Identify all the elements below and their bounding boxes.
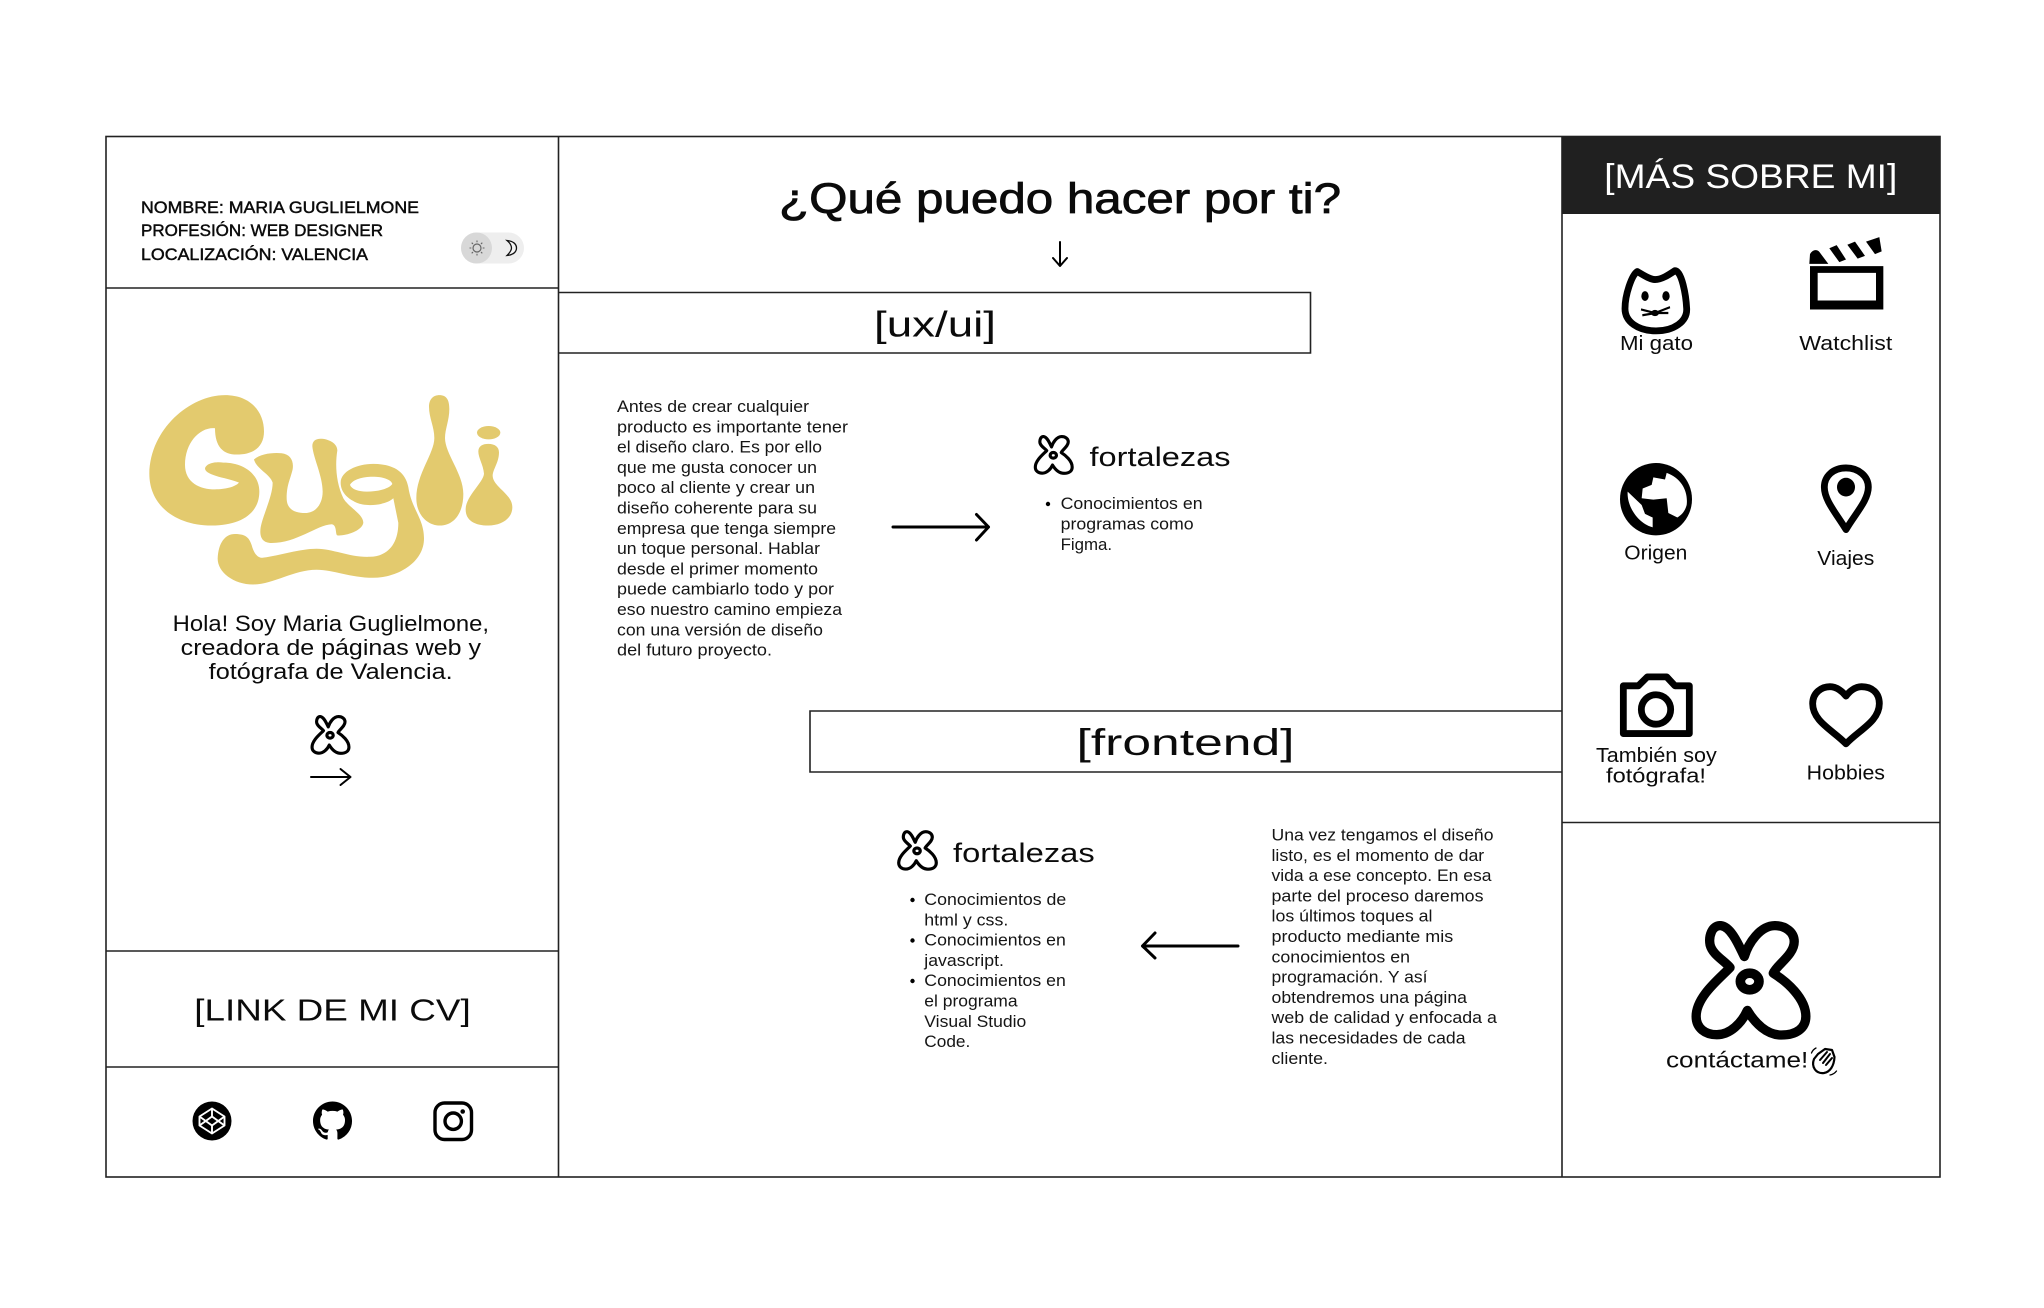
frontend description: web de calidad y enfocada a <box>1270 1008 1497 1027</box>
logo: Gugli <box>149 395 512 584</box>
intro text <box>173 611 489 684</box>
frontend description: Una vez tengamos el diseño <box>1272 826 1494 844</box>
ux/ui description: un toque personal. Hablar <box>617 539 820 558</box>
frontend description: los últimos toques al <box>1272 907 1432 926</box>
strengths list: Conocimientos en <box>924 931 1066 950</box>
frontend description <box>1270 826 1497 1068</box>
panel: personal info <box>106 198 558 288</box>
personal info text: PROFESIÓN: WEB DESIGNER <box>141 221 383 240</box>
ux/ui description <box>617 397 848 660</box>
intro text: Hola! Soy Maria Guglielmone, <box>173 611 489 636</box>
frontend description: producto mediante mis <box>1272 927 1453 946</box>
strengths list: Conocimientos de <box>924 890 1066 909</box>
icon: heart <box>1813 687 1879 744</box>
frontend description: obtendremos una página <box>1272 988 1468 1007</box>
frontend description: conocimientos en <box>1272 947 1410 966</box>
icon: globe <box>1620 463 1692 535</box>
label: Viajes: Viajes <box>1817 548 1874 570</box>
about me header: [MÁS SOBRE MI] <box>1604 158 1897 196</box>
strengths list <box>910 890 1066 1051</box>
frontend description: vida a ese concepto. En esa <box>1272 866 1492 885</box>
ux/ui description: con una versión de diseño <box>617 620 823 639</box>
strengths list: Conocimientos en <box>924 971 1066 990</box>
ux/ui title box <box>558 292 1310 353</box>
theme toggle <box>461 232 524 264</box>
ux/ui description: producto es importante tener <box>617 417 848 436</box>
ux/ui description: poco al cliente y crear un <box>617 478 815 497</box>
strengths list: html y css. <box>924 910 1008 929</box>
panel: social links <box>106 1067 558 1140</box>
arrow: left <box>1142 933 1238 958</box>
strengths list: Visual Studio <box>924 1012 1026 1031</box>
label: También soy fotógrafa: fotógrafa! <box>1606 766 1706 788</box>
arrow: right <box>893 514 988 540</box>
intro text: fotógrafa de Valencia. <box>209 659 453 684</box>
frontend description: programación. Y así <box>1272 968 1428 987</box>
icon: map pin <box>1824 468 1868 530</box>
icon: large flower <box>1696 926 1806 1035</box>
strengths list: Conocimientos en <box>1061 494 1203 513</box>
strengths list: programas como <box>1061 514 1194 534</box>
about me header <box>1562 136 1940 214</box>
strengths list: Figma. <box>1061 535 1112 554</box>
arrow: right <box>311 769 350 785</box>
icon: camera <box>1623 677 1689 734</box>
personal info text: LOCALIZACIÓN: VALENCIA <box>141 245 369 264</box>
label: Hobbies: Hobbies <box>1807 762 1885 784</box>
icon: flower <box>312 717 349 753</box>
ux/ui description: que me gusta conocer un <box>617 458 817 477</box>
ux/ui description: puede cambiarlo todo y por <box>617 580 834 599</box>
panel: intro <box>149 395 512 785</box>
frontend description: cliente. <box>1272 1049 1328 1068</box>
strengths list <box>1046 494 1203 554</box>
ux/ui description: eso nuestro camino empieza <box>617 600 843 619</box>
panel: contact <box>1562 822 1940 1075</box>
ux/ui description: Antes de crear cualquier <box>617 397 809 416</box>
personal info text <box>141 198 419 264</box>
icon: clapperboard <box>1809 237 1883 309</box>
ux/ui description: empresa que tenga siempre <box>617 519 836 538</box>
frontend description: las necesidades de cada <box>1272 1028 1466 1048</box>
intro text: creadora de páginas web y <box>181 635 481 660</box>
label: También soy fotógrafa <box>1596 745 1717 788</box>
strengths list: el programa <box>924 992 1018 1010</box>
contact text: contáctame! <box>1666 1048 1808 1072</box>
label: Watchlist: Watchlist <box>1799 333 1893 355</box>
label: Origen: Origen <box>1624 542 1687 564</box>
panel: outer frame and column dividers <box>106 136 1940 1177</box>
frontend title box <box>810 711 1562 772</box>
personal info text: NOMBRE: MARIA GUGLIELMONE <box>141 198 419 217</box>
label: Mi gato: Mi gato <box>1620 333 1693 355</box>
label: También soy fotógrafa: También soy <box>1596 745 1717 767</box>
strengths title: fortalezas <box>1090 442 1230 472</box>
panel: about me <box>1562 136 1940 788</box>
heading: ¿Qué puedo hacer por ti? <box>779 175 1341 223</box>
icon: flower <box>899 832 936 869</box>
icon: codepen <box>192 1102 232 1140</box>
ux/ui description: desde el primer momento <box>617 559 818 578</box>
strengths list: javascript. <box>923 951 1004 970</box>
icon: flower <box>1035 437 1072 473</box>
frontend description: listo, es el momento de dar <box>1272 846 1485 865</box>
icon: waving hand <box>1812 1048 1836 1075</box>
arrow: down <box>1053 242 1067 266</box>
ux/ui title box: [ux/ui] <box>874 304 996 344</box>
panel: ux/ui <box>558 292 1310 660</box>
panel: services <box>558 175 1562 1068</box>
ux/ui description: diseño coherente para su <box>617 498 817 518</box>
CV link text: [LINK DE MI CV] <box>194 992 471 1028</box>
icon: github <box>313 1102 352 1140</box>
ux/ui description: del futuro proyecto. <box>617 641 772 660</box>
frontend title box: [frontend] <box>1076 722 1294 763</box>
icon: cat <box>1625 271 1687 331</box>
strengths title: fortalezas <box>953 838 1095 868</box>
icon: instagram <box>435 1103 472 1140</box>
strengths list: Code. <box>924 1032 970 1051</box>
ux/ui description: el diseño claro. Es por ello <box>617 438 822 457</box>
panel: frontend <box>810 711 1562 1068</box>
frontend description: parte del proceso daremos <box>1272 886 1484 905</box>
